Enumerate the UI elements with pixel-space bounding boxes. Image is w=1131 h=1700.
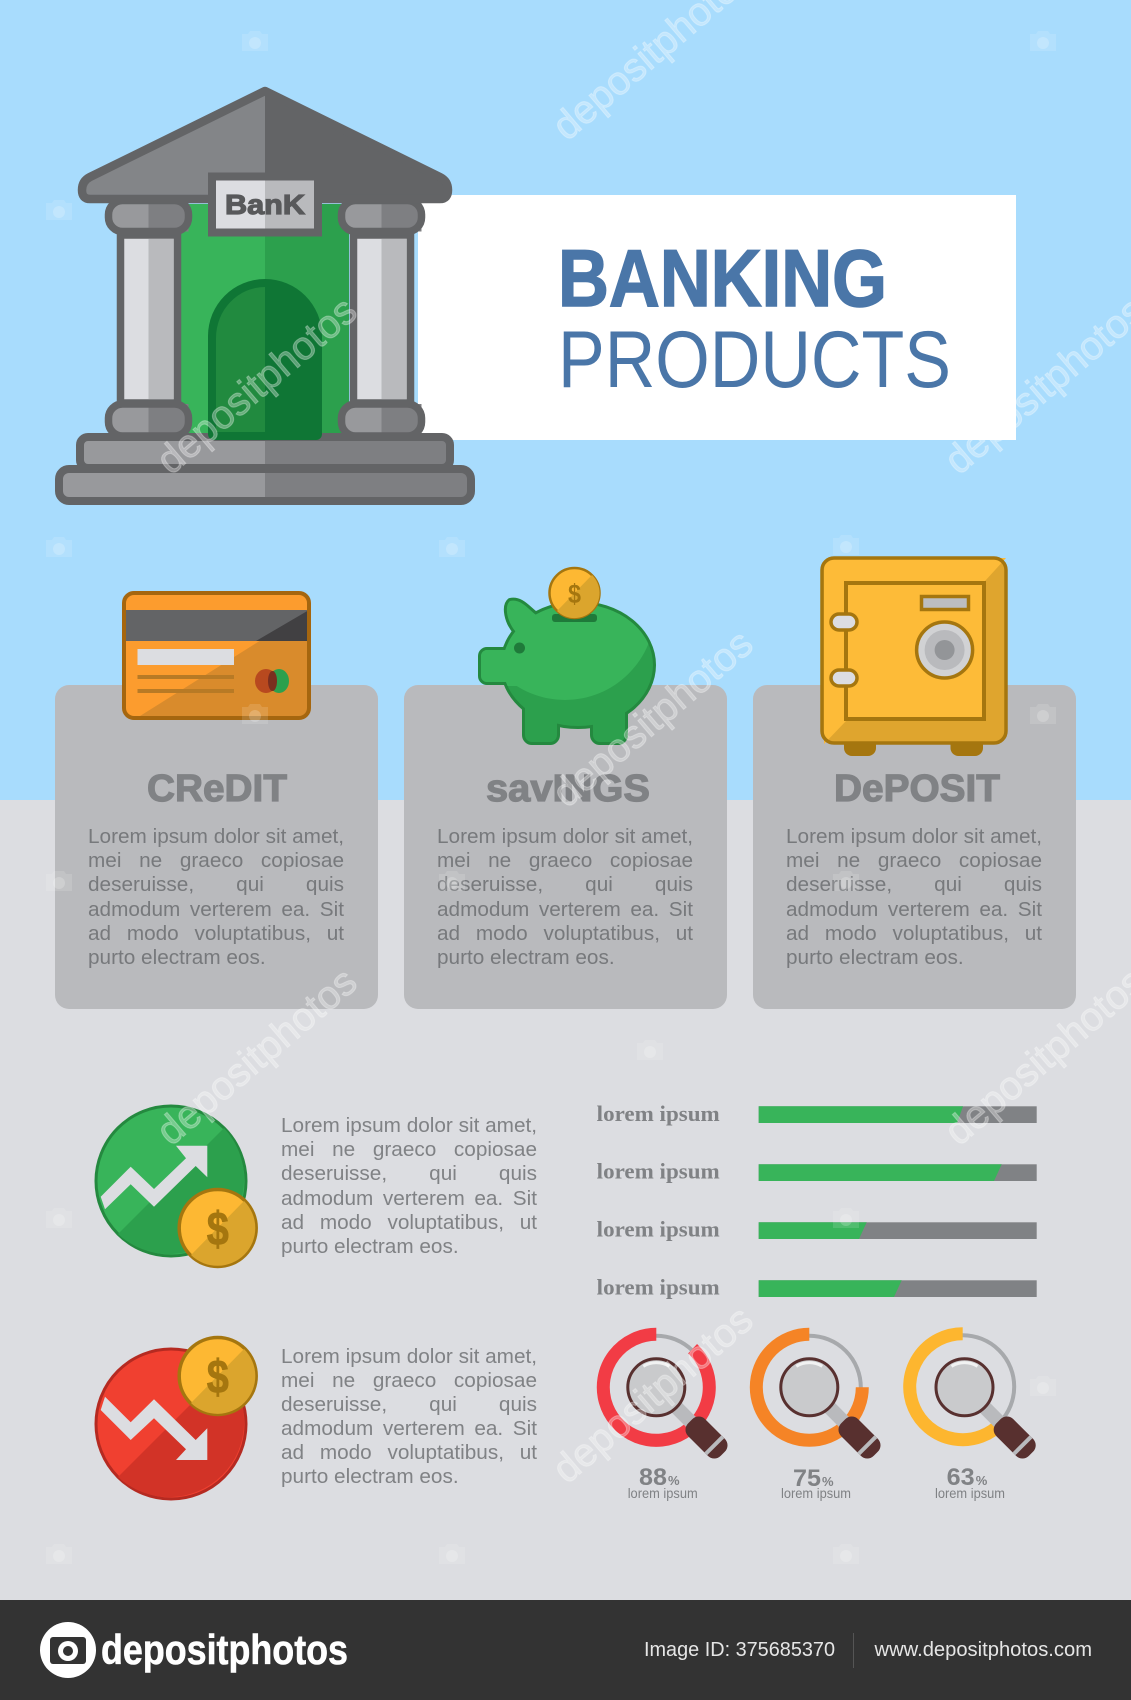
text: growth paragraph: deseruisse, qui quis bbox=[281, 1162, 537, 1185]
panel: deposit bbox=[753, 685, 1076, 1009]
heading: products: PRODUCTS bbox=[558, 315, 951, 405]
bar row 2 bbox=[597, 1158, 1037, 1183]
bar row 1 bbox=[597, 1101, 1037, 1126]
watermark layer: depositphotos bbox=[544, 1297, 761, 1492]
watermark layer: depositphotos bbox=[544, 621, 761, 816]
bar row 3 bbox=[597, 1217, 1037, 1242]
donut: 88 percent bbox=[603, 1334, 731, 1501]
text: deposit description: deseruisse, qui quis bbox=[786, 873, 1042, 896]
donut: 63 percent: 63 bbox=[947, 1464, 975, 1491]
heading: banking: BANKING bbox=[558, 234, 887, 324]
icon: credit card bbox=[124, 593, 309, 718]
text: decline paragraph: deseruisse, qui quis bbox=[281, 1393, 537, 1416]
text: credit description bbox=[88, 825, 344, 969]
text: credit description: purto electram eos. bbox=[88, 946, 266, 969]
text: growth paragraph: mei ne graeco copiosae bbox=[281, 1138, 537, 1161]
text: savings description: admodum verterem ea. Sit bbox=[437, 898, 693, 921]
text: savings description: deseruisse, qui quis bbox=[437, 873, 693, 896]
watermark layer: depositphotos bbox=[148, 288, 365, 483]
text: credit description: mei ne graeco copiosae bbox=[88, 849, 344, 872]
donut: 88 percent: lorem ipsum bbox=[628, 1485, 698, 1501]
text: decline paragraph: purto electram eos. bbox=[281, 1465, 459, 1488]
text: deposit description: Lorem ipsum dolor sit amet, bbox=[786, 825, 1042, 848]
text: decline paragraph: admodum verterem ea. Sit bbox=[281, 1417, 537, 1440]
heading: savings: savINGS bbox=[486, 768, 650, 810]
bar row 2: lorem ipsum bbox=[597, 1158, 720, 1183]
text: growth paragraph: Lorem ipsum dolor sit amet, bbox=[281, 1114, 537, 1137]
bar row 4 bbox=[597, 1274, 1037, 1299]
icon: growth circle with coin bbox=[96, 1106, 256, 1266]
donut: 63 percent bbox=[910, 1334, 1039, 1501]
donut: 63 percent: lorem ipsum bbox=[935, 1485, 1005, 1501]
text: savings description: Lorem ipsum dolor sit amet, bbox=[437, 825, 693, 848]
text: credit description: Lorem ipsum dolor sit amet, bbox=[88, 825, 344, 848]
text: growth paragraph: ad modo voluptatibus, ut bbox=[281, 1211, 537, 1234]
icon: falling coin: $ bbox=[568, 579, 581, 609]
icon: decline circle with coin bbox=[96, 1338, 256, 1499]
donut: 63 percent: % bbox=[976, 1473, 988, 1488]
text: deposit description bbox=[786, 825, 1042, 969]
text: growth paragraph: admodum verterem ea. Sit bbox=[281, 1187, 537, 1210]
bar row 4: lorem ipsum bbox=[597, 1274, 720, 1299]
footer bar bbox=[0, 1600, 1131, 1700]
sky background bbox=[0, 0, 1131, 800]
text: savings description: ad modo voluptatibus, ut bbox=[437, 922, 693, 945]
icon: safe bbox=[822, 558, 1006, 756]
text: decline paragraph bbox=[281, 1344, 537, 1488]
bar row 1: lorem ipsum bbox=[597, 1101, 720, 1126]
panel: savings bbox=[404, 685, 727, 1009]
text: decline paragraph: ad modo voluptatibus, ut bbox=[281, 1441, 537, 1464]
heading: credit: CReDIT bbox=[147, 768, 287, 810]
icon: decline circle with coin: $ bbox=[207, 1350, 229, 1403]
heading: deposit: DePOSIT bbox=[834, 768, 1000, 810]
watermark layer: depositphotos bbox=[148, 959, 365, 1154]
lower background bbox=[0, 800, 1131, 1600]
text: decline paragraph: Lorem ipsum dolor sit amet, bbox=[281, 1344, 537, 1368]
title banner bbox=[418, 195, 1016, 440]
icon: bank building: BanK bbox=[225, 189, 305, 220]
text: credit description: ad modo voluptatibus, ut bbox=[88, 922, 344, 945]
text: savings description bbox=[437, 825, 693, 969]
text: credit description: admodum verterem ea. Sit bbox=[88, 898, 344, 921]
text: deposit description: mei ne graeco copiosae bbox=[786, 849, 1042, 872]
bar row 3: lorem ipsum bbox=[597, 1217, 720, 1242]
text: savings description: mei ne graeco copiosae bbox=[437, 849, 693, 872]
website: www.depositphotos.com bbox=[873, 1639, 1092, 1661]
donut: 88 percent: 88 bbox=[639, 1464, 667, 1491]
icon: bank building bbox=[59, 91, 471, 501]
donut: 75 percent: lorem ipsum bbox=[781, 1485, 851, 1501]
icon: piggy bank bbox=[478, 566, 656, 745]
image id: Image ID: 375685370 bbox=[644, 1639, 835, 1661]
donut: 75 percent: % bbox=[822, 1474, 834, 1489]
text: credit description: deseruisse, qui quis bbox=[88, 873, 344, 896]
text: growth paragraph bbox=[281, 1114, 537, 1258]
donut: 88 percent: % bbox=[668, 1473, 680, 1488]
donut: 75 percent bbox=[756, 1334, 884, 1501]
footer logo icon bbox=[40, 1622, 96, 1678]
text: growth paragraph: purto electram eos. bbox=[281, 1235, 459, 1258]
text: deposit description: admodum verterem ea. Sit bbox=[786, 898, 1042, 921]
donut: 75 percent: 75 bbox=[793, 1465, 821, 1492]
text: deposit description: ad modo voluptatibus, ut bbox=[786, 922, 1042, 945]
panel: credit bbox=[55, 685, 378, 1009]
text: decline paragraph: mei ne graeco copiosae bbox=[281, 1369, 537, 1392]
text: deposit description: purto electram eos. bbox=[786, 946, 964, 969]
icon: falling coin bbox=[550, 568, 600, 618]
icon: growth circle with coin: $ bbox=[207, 1202, 229, 1255]
footer logo wordmark: depositphotos bbox=[101, 1626, 348, 1673]
bar chart bbox=[597, 1101, 1037, 1299]
text: savings description: purto electram eos. bbox=[437, 946, 615, 969]
